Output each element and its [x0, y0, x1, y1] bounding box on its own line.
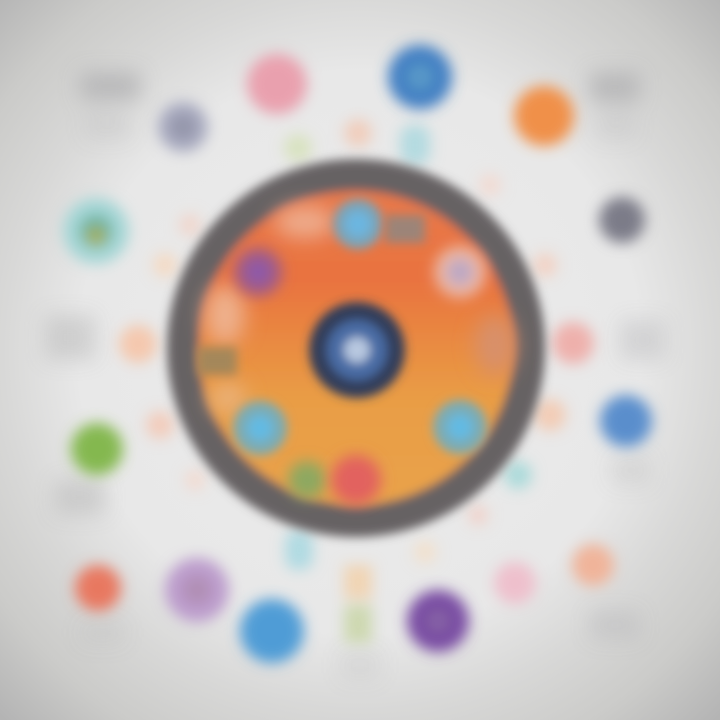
inner node: pale right — [434, 246, 486, 298]
outer node: right blue — [600, 395, 652, 447]
inner node: right blue — [433, 400, 487, 454]
wheel ring — [183, 175, 529, 521]
inner node: left tag — [197, 347, 237, 375]
inner node: top blue — [333, 199, 383, 249]
outer node: blue — [388, 45, 452, 109]
center hub — [309, 302, 405, 398]
outer node: grey violet — [599, 197, 645, 243]
inner node: grey tag — [385, 215, 425, 243]
outer node: lilac — [165, 558, 229, 622]
outer node: coral — [75, 565, 121, 611]
main wheel — [183, 175, 529, 521]
inner node: purple — [234, 248, 282, 296]
inner node: red — [331, 455, 381, 505]
spokes and small connector marks — [119, 119, 594, 643]
outer node: sky blue — [240, 599, 304, 663]
inner node: green — [288, 461, 326, 499]
outer node: pale pink — [494, 562, 536, 604]
faint outer text blocks — [45, 72, 665, 680]
wheel highlights — [205, 206, 515, 414]
outer node: peach — [572, 544, 614, 586]
outer node: slate — [158, 102, 208, 152]
outer node: pink — [247, 54, 307, 114]
outer node: teal with green core — [63, 198, 129, 264]
inner node: left blue — [233, 401, 287, 455]
outer node: green — [71, 423, 123, 475]
outer node: purple — [407, 590, 469, 652]
outer node: orange — [514, 86, 574, 146]
